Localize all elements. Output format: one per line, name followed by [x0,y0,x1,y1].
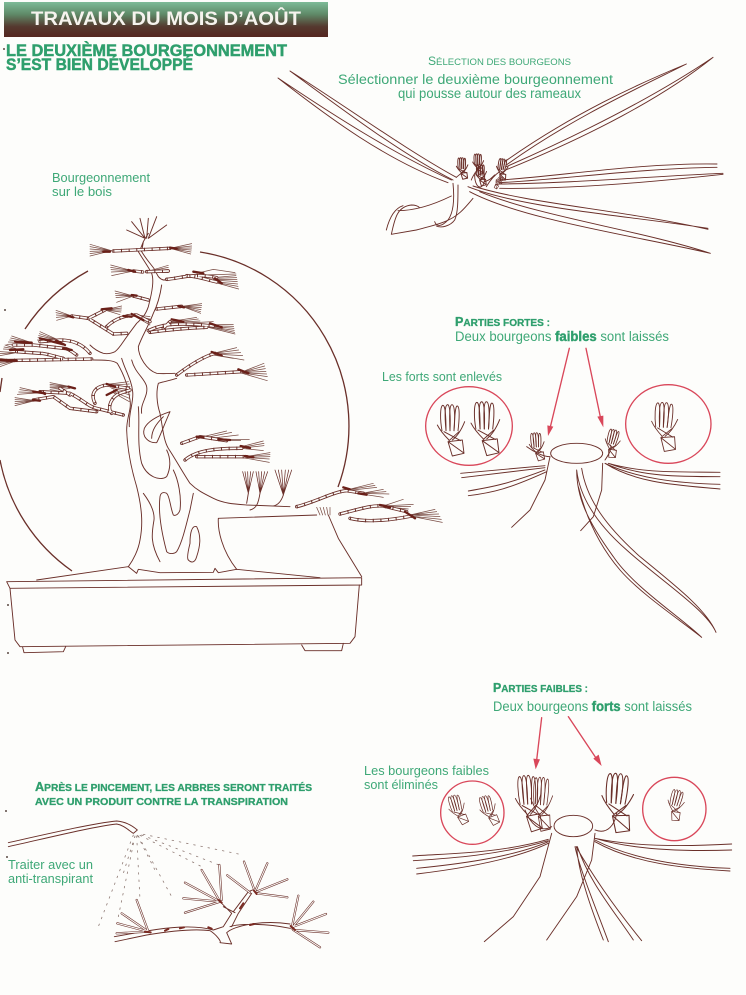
main heading: LE DEUXIÈME BOURGEONNEMENT [6,41,288,60]
small upright shoots [243,470,292,495]
label: strong parts heading: Deux bourgeons faibles sont laissés [455,329,669,344]
specks from the scan [3,48,9,858]
icon: spray wand [8,821,137,847]
text block: selection of buds: qui pousse autour des rameaux [398,86,581,101]
illustration: cut branch with strong buds [413,717,732,942]
main heading [6,41,288,74]
illustration: sun circle behind the tree [0,252,349,571]
title band: TRAVAUX DU MOIS D’AOÛT [31,8,301,30]
top tuft [127,217,167,238]
illustration: bonsai tree in pot [0,217,442,653]
text block: selection of buds: Sélectionner le deuxième bourgeonnement [338,72,613,87]
main heading: S’EST BIEN DÉVELOPPÉ [6,55,193,74]
icon: right circle with bud [626,385,711,463]
panel: weak parts [364,681,732,942]
label: bud growth on wood: sur le bois [52,184,113,199]
icon: strong buds on branch [514,772,635,834]
text block: selection of buds [338,54,613,101]
text block: selection of buds: SÉLECTION DES BOURGEONS [428,54,571,68]
label: weak parts heading [493,681,692,714]
text block: anti-transpirant treatment heading [35,780,312,808]
spray mist [98,834,243,927]
trunk [90,233,362,577]
label: treat with anti-transpirant: anti-transpirant [8,871,93,886]
illustration: cut branch with weak buds [426,348,720,637]
dark wire clumps [0,248,415,518]
label: bud growth on wood: Bourgeonnement [52,170,150,185]
panel: strong parts [382,315,720,637]
pot [7,567,362,653]
illustration: sprayer and pine branch [8,821,328,947]
label: strong parts heading [455,315,669,344]
label: treat with anti-transpirant: Traiter avec un [8,857,93,872]
label: treat with anti-transpirant [8,857,93,886]
label: weak parts heading: Deux bourgeons forts sont laissés [493,699,692,714]
illustration: selected shoot with long needles [278,57,723,253]
label: strong buds removed: Les forts sont enlevés [382,369,502,384]
arrows [533,717,602,769]
icon: left circle with strong buds [426,387,512,465]
label: bud growth on wood [52,170,150,199]
text block: anti-transpirant treatment heading: APRÈS LE PINCEMENT, LES ARBRES SERONT TRAITÉS [35,780,312,794]
icon: right circle with bud [643,777,706,841]
label: weak buds eliminated: Les bourgeons faibles [364,763,489,778]
icon: left circle with weak buds [441,781,504,844]
label: weak buds eliminated [364,763,489,792]
icon: weak buds on branch [529,428,623,461]
pine branch [114,862,328,947]
needle pads [0,244,442,522]
label: strong parts heading: PARTIES FORTES : [455,315,550,329]
label: weak parts heading: PARTIES FAIBLES : [493,681,588,695]
icon: small buds on shoot [456,154,509,190]
title band [4,2,328,37]
wired branches [0,248,412,521]
arrows [547,348,603,436]
text block: anti-transpirant treatment heading: AVEC UN PRODUIT CONTRE LA TRANSPIRATION [35,797,288,808]
label: weak buds eliminated: sont éliminés [364,777,438,792]
